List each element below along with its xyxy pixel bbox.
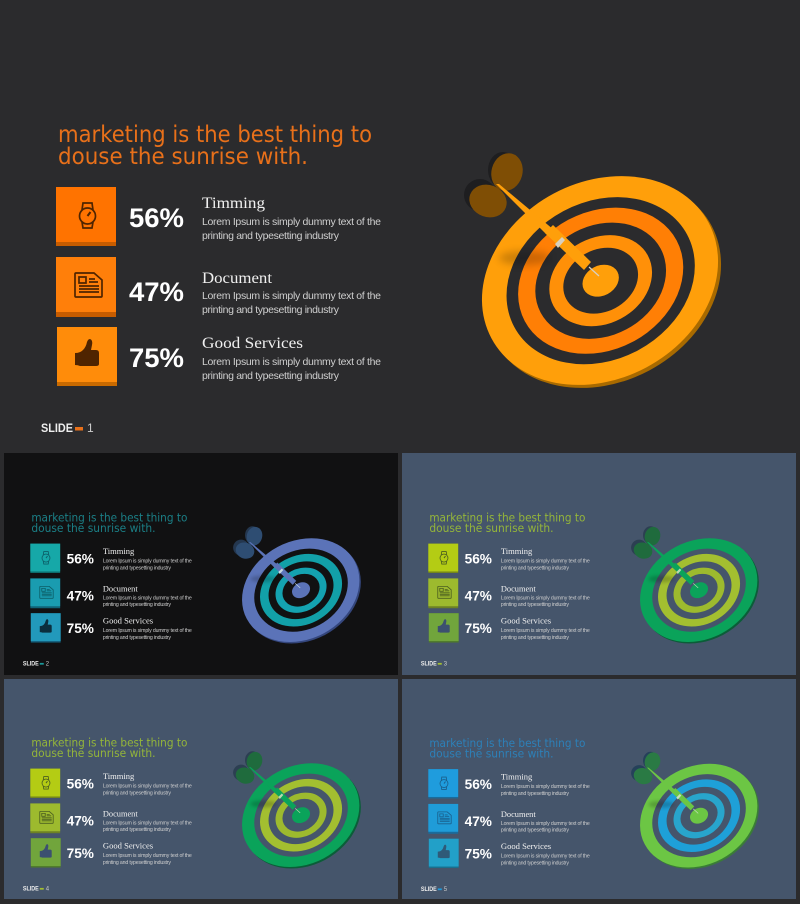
dartboard with dart (224, 743, 379, 889)
slide 1: orange (41, 122, 758, 435)
text block: Document: Document (501, 584, 537, 593)
stat: 47%: 47% (67, 813, 94, 828)
icon: document tile (428, 578, 458, 608)
text block: Good Services: printing and typesetting industry (501, 635, 569, 641)
text block: Document (202, 270, 381, 316)
text block: Timming (103, 772, 192, 796)
text block: Document: Document (103, 584, 139, 593)
slide number: 3 (444, 661, 448, 667)
text block: Document (103, 584, 192, 608)
icon: thumbs up tile (429, 613, 459, 643)
slide 1 title: marketing is the best thing to (58, 122, 372, 148)
text block: Document: printing and typesetting industry (103, 602, 171, 608)
text block: Good Services: Good Services (103, 617, 153, 626)
slide number: SLIDE (421, 887, 437, 893)
icon: watch tile (30, 769, 60, 798)
text block: Timming: Lorem Ipsum is simply dummy text of the (202, 216, 381, 228)
slide number (421, 661, 448, 667)
slide number (421, 887, 448, 893)
slide 4: green on slate (23, 735, 379, 892)
slide number: 4 (46, 886, 50, 892)
stat: 75%: 75% (67, 621, 94, 636)
slide 5 title: douse the sunrise with. (429, 747, 554, 761)
text block: Timming: Lorem Ipsum is simply dummy text of the (103, 784, 192, 790)
text block: Document: Document (501, 810, 537, 819)
text block: Document (103, 809, 192, 833)
text block: Timming (103, 547, 192, 571)
slide 4 title: douse the sunrise with. (31, 746, 156, 760)
slide number: SLIDE (23, 661, 39, 667)
text block: Timming: printing and typesetting industry (501, 791, 569, 797)
slide 4 title (31, 735, 187, 760)
panel: slide 3 background (402, 453, 796, 675)
icon: thumbs up tile (31, 613, 61, 643)
stat: 75%: 75% (465, 847, 492, 862)
text block: Good Services (103, 617, 192, 641)
stat: 56%: 56% (465, 552, 492, 567)
text block: Timming: printing and typesetting industry (103, 790, 171, 796)
text block: Good Services: Lorem Ipsum is simply dummy text of the (501, 854, 590, 860)
dartboard with dart (622, 518, 777, 664)
icon: watch tile (428, 544, 458, 573)
icon: document tile (30, 803, 60, 833)
text block: Timming: Timming (103, 772, 134, 781)
text block: Timming: Lorem Ipsum is simply dummy text of the (501, 784, 590, 790)
text block: Timming: printing and typesetting industry (202, 230, 340, 242)
slide 2 title (31, 510, 187, 535)
slide 3 title: marketing is the best thing to (429, 510, 585, 524)
text block: Good Services: Lorem Ipsum is simply dummy text of the (202, 356, 381, 368)
text block: Timming: printing and typesetting industry (501, 565, 569, 571)
text block: Good Services (202, 335, 381, 382)
text block: Timming: Timming (501, 547, 532, 556)
icon: watch tile (30, 544, 60, 573)
text block: Good Services: Good Services (501, 842, 551, 851)
text block: Document: Lorem Ipsum is simply dummy text of the (501, 595, 590, 601)
icon: thumbs up tile (429, 839, 459, 868)
stat: 75%: 75% (129, 343, 184, 373)
stat: 56%: 56% (465, 777, 492, 792)
text block: Timming (501, 773, 590, 797)
slide number: 5 (444, 887, 448, 893)
icon: thumbs up tile (57, 327, 117, 386)
stat: 47%: 47% (67, 588, 94, 603)
text block: Document: Lorem Ipsum is simply dummy text of the (103, 820, 192, 826)
text block: Document: Document (202, 270, 273, 287)
panel: slide 4 background (4, 679, 398, 899)
stat: 47%: 47% (129, 277, 184, 307)
dartboard with dart (622, 744, 777, 889)
icon: watch tile (56, 187, 116, 246)
icon: document tile (30, 578, 60, 608)
slide 3: green on slate (421, 510, 777, 667)
text block: Timming: Timming (202, 195, 265, 212)
text block: Good Services: Lorem Ipsum is simply dummy text of the (501, 628, 590, 634)
text block: Timming: Timming (501, 773, 532, 782)
icon: thumbs up tile (31, 838, 61, 868)
slide 1 title: douse the sunrise with. (58, 144, 308, 170)
text block: Document: printing and typesetting industry (103, 827, 171, 833)
text block: Good Services: printing and typesetting industry (103, 635, 171, 641)
slide 4 title: marketing is the best thing to (31, 735, 187, 749)
slide 5 title: marketing is the best thing to (429, 736, 585, 750)
slide 2 title: marketing is the best thing to (31, 510, 187, 524)
stat: 56%: 56% (129, 203, 184, 233)
text block: Timming: Timming (103, 547, 134, 556)
slide number: 2 (46, 661, 50, 667)
dartboard with dart (445, 136, 758, 428)
slide 3 title (429, 510, 585, 535)
icon: watch tile (428, 769, 458, 798)
text block: Good Services (103, 842, 192, 866)
slide number (23, 661, 50, 667)
stat: 75%: 75% (67, 846, 94, 861)
text block: Timming: Lorem Ipsum is simply dummy text of the (501, 559, 590, 565)
text block: Document: Lorem Ipsum is simply dummy text of the (501, 821, 590, 827)
text block: Good Services: Good Services (501, 617, 551, 626)
slide number (23, 886, 50, 892)
icon: document tile (56, 257, 116, 317)
text block: Good Services: Good Services (202, 335, 303, 352)
text block: Timming (202, 195, 381, 242)
slide number: SLIDE (23, 886, 39, 892)
text block: Good Services: Good Services (103, 842, 153, 851)
text block: Good Services: printing and typesetting industry (202, 370, 340, 382)
text block: Good Services: Lorem Ipsum is simply dummy text of the (103, 853, 192, 859)
text block: Document: printing and typesetting industry (501, 602, 569, 608)
slide number: 1 (87, 421, 94, 435)
slide number (41, 421, 94, 435)
text block: Document: printing and typesetting industry (501, 828, 569, 834)
stat: 75%: 75% (465, 621, 492, 636)
text block: Good Services (501, 617, 590, 641)
text block: Timming (501, 547, 590, 571)
slide 2: teal and indigo (23, 510, 379, 667)
text block: Good Services: printing and typesetting industry (501, 861, 569, 867)
text block: Document: Document (103, 809, 139, 818)
text block: Document (501, 584, 590, 608)
text block: Document: Lorem Ipsum is simply dummy text of the (103, 595, 192, 601)
text block: Timming: printing and typesetting industry (103, 565, 171, 571)
stat: 56%: 56% (67, 777, 94, 792)
text block: Good Services: Lorem Ipsum is simply dummy text of the (103, 628, 192, 634)
slide 5: blue and lime on slate (421, 736, 777, 893)
text block: Document: printing and typesetting industry (202, 304, 340, 316)
text block: Good Services (501, 842, 590, 867)
slide number: SLIDE (421, 661, 437, 667)
icon: document tile (428, 804, 458, 834)
text block: Timming: Lorem Ipsum is simply dummy text of the (103, 559, 192, 565)
stat: 56%: 56% (67, 552, 94, 567)
dartboard with dart (224, 518, 379, 664)
text block: Document (501, 810, 590, 834)
text block: Document: Lorem Ipsum is simply dummy text of the (202, 290, 381, 302)
slide number: SLIDE (41, 421, 73, 435)
slide 1 title (58, 122, 372, 170)
slide 2 title: douse the sunrise with. (31, 521, 156, 535)
text block: Good Services: printing and typesetting industry (103, 860, 171, 866)
panel: slide 5 background (402, 679, 796, 899)
slide 5 title (429, 736, 585, 761)
panel: slide 2 background (4, 453, 398, 675)
stat: 47%: 47% (465, 814, 492, 829)
stat: 47%: 47% (465, 588, 492, 603)
slide 3 title: douse the sunrise with. (429, 521, 554, 535)
